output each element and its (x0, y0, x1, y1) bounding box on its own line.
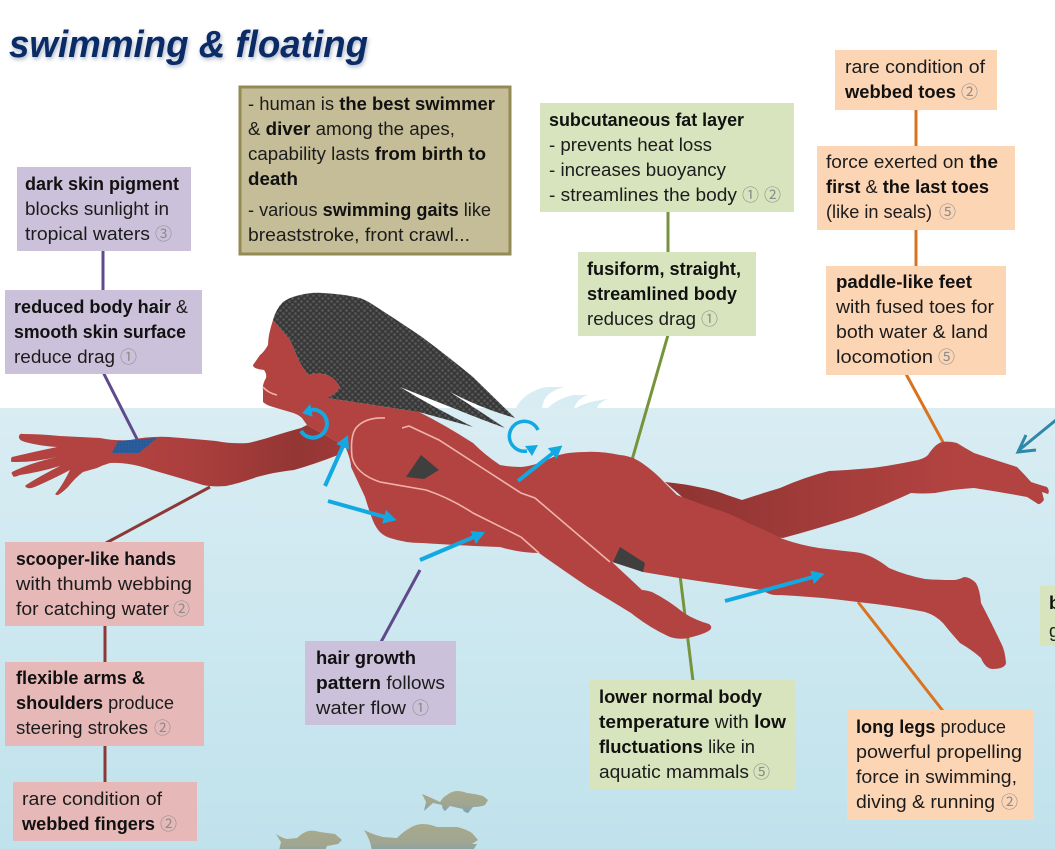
box: scooper-like hands (5, 542, 204, 626)
back leg (665, 442, 1049, 538)
box: webbed fingers: ② (160, 810, 177, 835)
box: flexible arms: ② (154, 714, 171, 739)
box: cropped right edge (1040, 586, 1055, 646)
leader: hair growth (381, 570, 420, 642)
box: hair growth pattern: pattern follows (316, 673, 445, 693)
box: hair growth pattern: water flow (315, 698, 407, 718)
pelvic patch (613, 547, 645, 572)
box: dark skin pigment: dark skin pigment (25, 174, 179, 194)
box: paddle-like feet: both water & land (836, 322, 988, 342)
callout: best swimmer: capability lasts from birth to (248, 144, 486, 164)
box: subcutaneous fat: ① (742, 181, 759, 206)
rotation arrow: hip (509, 421, 538, 456)
flow arrows (325, 446, 813, 601)
box: dark skin pigment: blocks sunlight in (25, 199, 169, 219)
box: hair growth pattern: ① (412, 694, 429, 719)
swimmer figure (11, 293, 1049, 669)
callout: best swimmer: breaststroke, front crawl... (248, 225, 470, 245)
callout: best swimmer: - human is the best swimmer (248, 94, 495, 114)
box: force on toes: (like in seals) (826, 202, 932, 222)
callout: best swimmer: death (248, 169, 298, 189)
title: swimming & floating (9, 24, 368, 66)
arm and hand (11, 425, 345, 495)
box: lower body temperature: aquatic mammals (599, 762, 749, 782)
callout: best swimmer: & diver among the apes, (248, 119, 455, 139)
box: webbed fingers (13, 782, 197, 841)
box: lower body temperature: fluctuations like in (599, 737, 755, 757)
box: paddle-like feet: locomotion (836, 347, 933, 367)
box: reduced body hair: reduced body hair & (14, 297, 188, 317)
box: subcutaneous fat: - prevents heat loss (549, 135, 712, 155)
box: fusiform body: reduces drag (587, 309, 696, 329)
box: lower body temperature: temperature with low (599, 712, 787, 732)
box: reduced body hair (5, 290, 202, 374)
box: paddle-like feet: paddle-like feet (836, 272, 972, 292)
box: fusiform body: ① (701, 305, 718, 330)
body contour lines (263, 387, 610, 562)
arrow: water flow top right (1018, 420, 1055, 452)
box: force on toes: ⑤ (939, 198, 956, 223)
box: webbed toes (835, 50, 997, 110)
box: reduced body hair: ① (120, 343, 137, 368)
box: long legs: long legs produce (856, 717, 1006, 737)
leader: green lines (632, 211, 693, 681)
box: force on toes (817, 146, 1015, 230)
box: webbed toes: rare condition of (845, 57, 986, 77)
forearm skin patch (112, 438, 157, 453)
box: flexible arms: steering strokes (16, 718, 148, 738)
leader: orange lines (858, 109, 944, 711)
rotation arrow: shoulder (301, 405, 327, 438)
box: webbed fingers: webbed fingers (21, 814, 155, 834)
box: paddle-like feet: ⑤ (938, 343, 955, 368)
box: hair growth pattern: hair growth (316, 648, 416, 668)
box: paddle-like feet (826, 266, 1006, 375)
box: subcutaneous fat: ② (764, 181, 781, 206)
box: long legs: powerful propelling (856, 742, 1022, 762)
box: subcutaneous fat: - streamlines the body (549, 185, 737, 205)
box: long legs (847, 710, 1034, 820)
box: dark skin pigment: ③ (155, 220, 172, 245)
leader: dark skin to body hair (103, 250, 137, 439)
splash waves (516, 387, 608, 408)
box: fusiform body (578, 252, 756, 336)
box: fusiform body: fusiform, straight, (587, 259, 741, 279)
box: hair growth pattern (305, 641, 456, 725)
box: dark skin pigment: tropical waters (25, 224, 150, 244)
box: subcutaneous fat: subcutaneous fat layer (549, 110, 744, 130)
box: flexible arms (5, 662, 204, 746)
box: paddle-like feet: with fused toes for (835, 297, 994, 317)
box: force on toes: force exerted on the (826, 152, 998, 172)
box: flexible arms: shoulders produce (16, 693, 174, 713)
box: force on toes: first & the last toes (826, 177, 989, 197)
box: long legs: ② (1001, 788, 1018, 813)
callout: best swimmer (240, 87, 510, 254)
box: webbed toes: webbed toes (844, 82, 956, 102)
box: lower body temperature: ⑤ (753, 758, 770, 783)
box: subcutaneous fat (540, 103, 794, 212)
fish school (276, 791, 488, 849)
box: scooper-like hands: ② (173, 595, 190, 620)
box: webbed toes: ② (961, 78, 978, 103)
hair (273, 293, 515, 428)
box: long legs: force in swimming, (856, 767, 1017, 787)
box: scooper-like hands: for catching water (16, 599, 169, 619)
box: fusiform body: streamlined body (587, 284, 737, 304)
body (253, 320, 1006, 669)
armpit patch (406, 455, 439, 479)
box: scooper-like hands: scooper-like hands (16, 549, 176, 569)
box: long legs: diving & running (856, 792, 995, 812)
box: flexible arms: flexible arms & (16, 668, 145, 688)
box: scooper-like hands: with thumb webbing (15, 574, 192, 594)
box: reduced body hair: reduce drag (14, 347, 115, 367)
box: lower body temperature: lower normal body (599, 687, 762, 707)
callout: best swimmer: - various swimming gaits like (248, 200, 491, 220)
water background (0, 408, 1055, 849)
leader: hands arm chain (105, 487, 210, 783)
box: lower body temperature (590, 680, 795, 790)
box: reduced body hair: smooth skin surface (14, 322, 186, 342)
box: subcutaneous fat: - increases buoyancy (549, 160, 726, 180)
box: dark skin pigment (17, 167, 191, 251)
box: webbed fingers: rare condition of (22, 789, 163, 809)
